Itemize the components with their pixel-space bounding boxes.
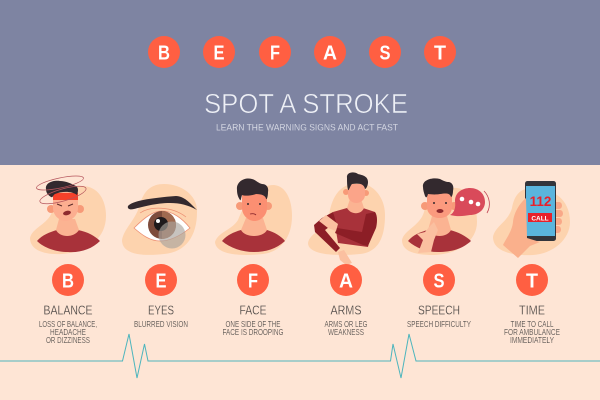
column: eyes: [134, 264, 188, 329]
column: eyes: EYES: [148, 302, 174, 318]
top badges: BEFAST: T: [434, 42, 446, 64]
column: balance: OR DIZZINESS: [46, 336, 90, 345]
column: eyes: BLURRED VISION: [134, 320, 188, 329]
call button: CALL: [531, 216, 549, 222]
illustration: face: [215, 179, 292, 255]
column: arms: A: [339, 270, 353, 292]
title: SPOT A STROKE: [204, 88, 408, 119]
column: arms: [324, 264, 368, 337]
illustration: time: [493, 181, 570, 258]
column: face: F: [248, 270, 258, 292]
column: balance: [39, 264, 97, 345]
top badges: BEFAST: S: [380, 42, 390, 64]
header panel: [0, 0, 600, 165]
column: time: TIME TO CALL: [510, 320, 554, 329]
top badges: BEFAST: E: [214, 42, 224, 64]
column: eyes: E: [156, 270, 166, 292]
column: face: ONE SIDE OF THE: [226, 320, 280, 329]
illustration: balance: [30, 173, 106, 254]
column: balance: HEADACHE: [50, 328, 86, 337]
top badges: BEFAST: B: [158, 42, 170, 64]
column: arms: ARMS: [330, 302, 362, 318]
illustration: arms: [308, 172, 385, 265]
column: arms: ARMS OR LEG: [324, 320, 368, 329]
column: face: [222, 264, 284, 337]
column: speech: S: [434, 270, 444, 292]
column: time: T: [526, 270, 538, 292]
top badges: BEFAST: F: [270, 42, 280, 64]
column: face: FACE: [240, 302, 267, 318]
column: balance: LOSS OF BALANCE,: [39, 320, 97, 329]
column: speech: SPEECH DIFFICULTY: [407, 320, 472, 329]
heartbeat line: [0, 334, 600, 378]
text: 112: 112: [530, 194, 551, 209]
column: speech: SPEECH: [418, 302, 460, 318]
top badges: BEFAST: [148, 36, 456, 68]
column: time: FOR AMBULANCE: [504, 328, 560, 337]
top badges: BEFAST: A: [323, 42, 337, 64]
column: time: [504, 264, 560, 345]
subtitle: LEARN THE WARNING SIGNS AND ACT FAST: [216, 122, 398, 134]
illustration: speech: [402, 178, 489, 255]
column: arms: WEAKNESS: [328, 328, 364, 337]
column: balance: BALANCE: [44, 302, 93, 318]
column: speech: [407, 264, 472, 329]
illustration: eye: [122, 184, 197, 255]
column: time: IMMEDIATELY: [510, 336, 555, 345]
column: balance: B: [62, 270, 74, 292]
column: face: FACE IS DROOPING: [222, 328, 284, 337]
column: time: TIME: [519, 302, 545, 318]
